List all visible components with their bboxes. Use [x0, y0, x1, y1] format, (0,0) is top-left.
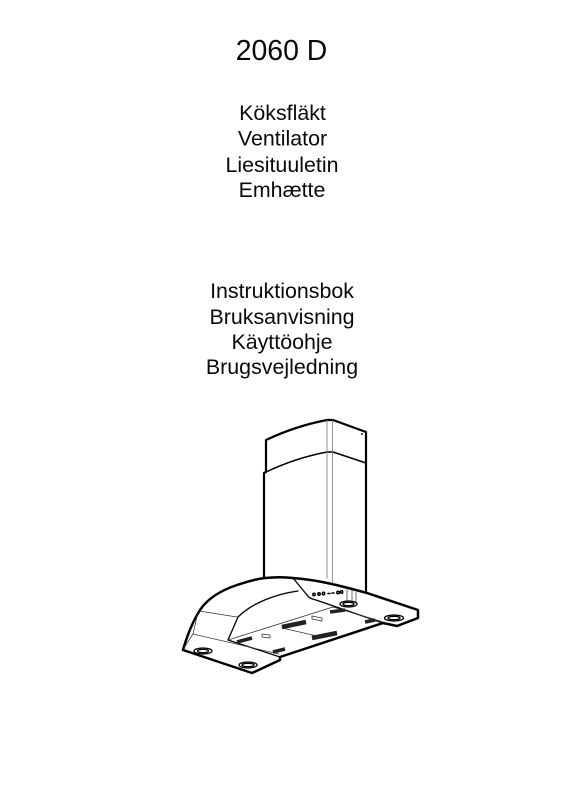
- text block: product names: Ventilator: [238, 126, 327, 150]
- text block: product names: Emhætte: [239, 178, 325, 202]
- filters and lights: [194, 601, 404, 668]
- chimney: [264, 420, 366, 593]
- small handles: [262, 616, 322, 638]
- illustration: cooker hood: [183, 420, 418, 673]
- text block: manual names: Käyttöohje: [231, 330, 333, 354]
- text block: product names: Liesituuletin: [226, 153, 338, 177]
- text block: manual names: [206, 279, 358, 379]
- text block: manual names: Brugsvejledning: [206, 355, 358, 379]
- control panel buttons: [313, 591, 343, 596]
- hood body: [183, 577, 418, 673]
- text block: product names: [226, 101, 338, 202]
- filter clips: [237, 610, 375, 652]
- text block: product names: Köksfläkt: [239, 101, 326, 125]
- text block: manual names: Bruksanvisning: [209, 305, 355, 329]
- text block: manual names: Instruktionsbok: [210, 279, 354, 303]
- title: 2060 D: [236, 35, 327, 67]
